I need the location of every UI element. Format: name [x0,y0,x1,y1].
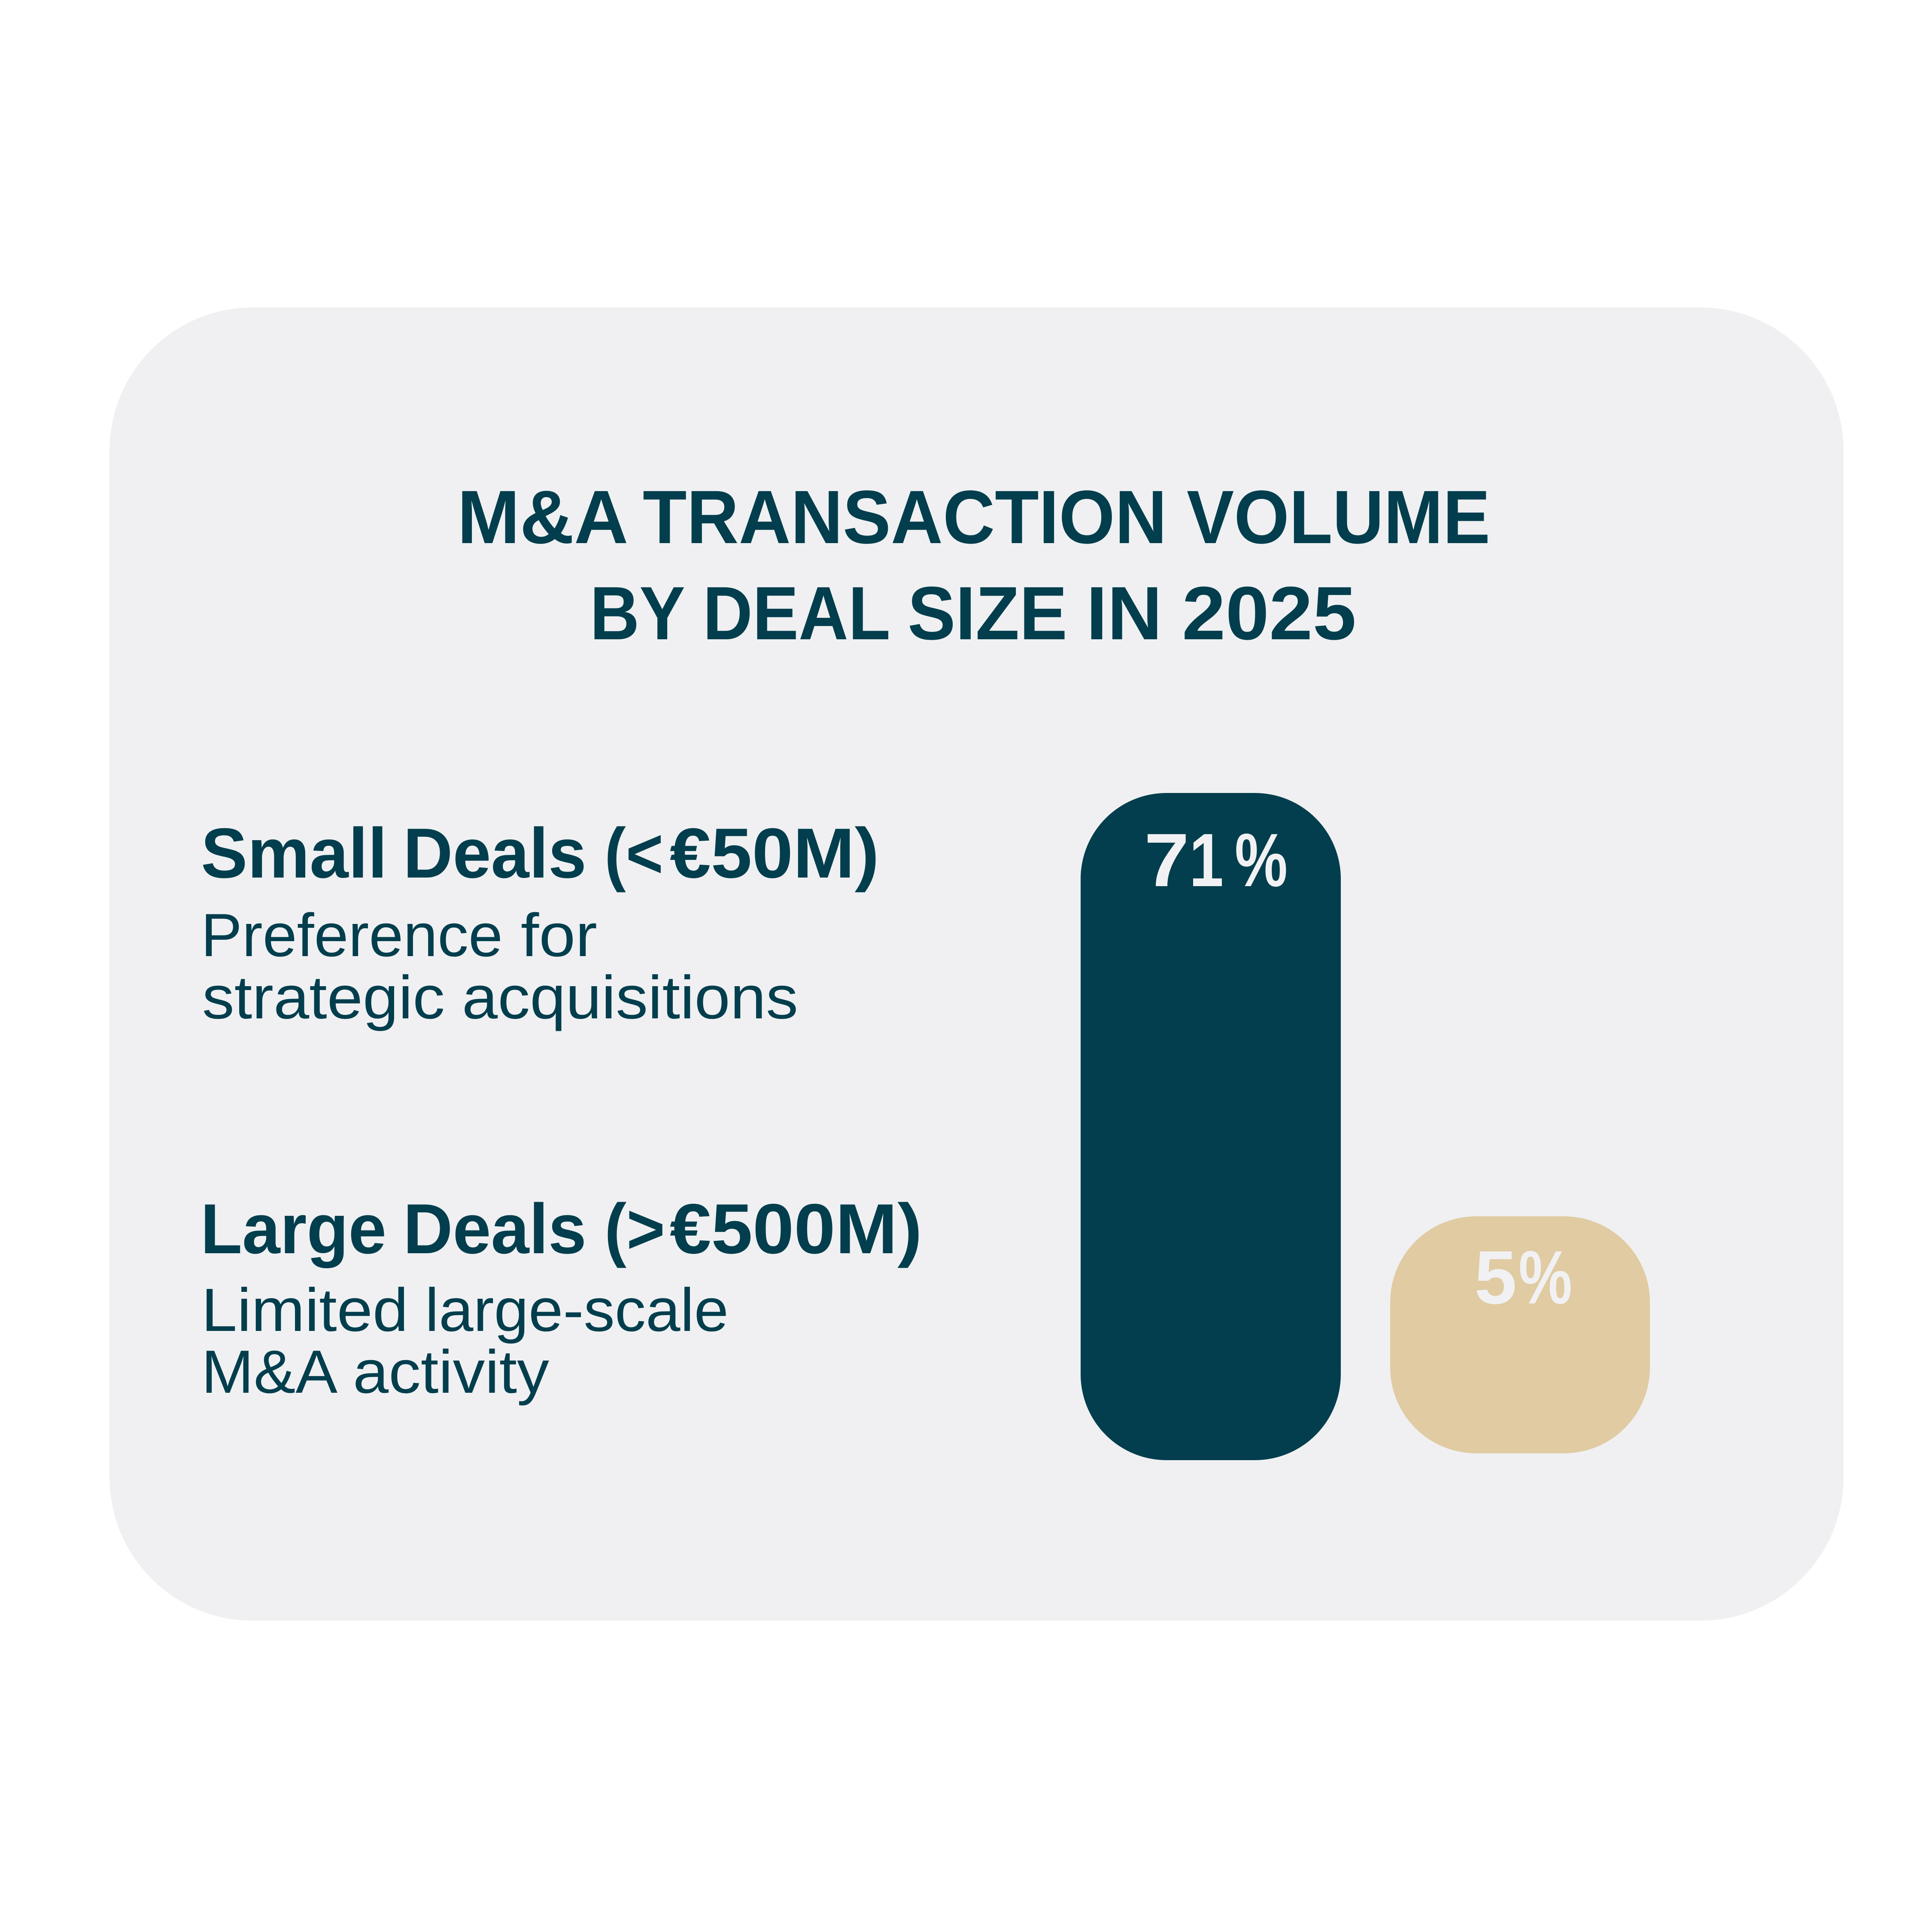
text block: large deals: Limited [201,1276,408,1344]
text block: large deals: large-scale [425,1276,729,1344]
title: IN [1086,571,1162,656]
text block: small deals: €50M) [670,814,879,893]
bar: large deals 5% [1390,1216,1650,1453]
text block: large deals: €500M) [670,1189,922,1268]
text block: large deals: Deals [403,1189,586,1268]
title [457,475,1490,656]
title: DEAL [703,571,889,656]
text block: large deals: activity [353,1338,549,1406]
bar: small deals 71% [1081,793,1341,1460]
text block: small deals: Preference [201,901,503,969]
title: TRANSACTION [643,475,1167,559]
text block: small deals: Deals [403,814,586,893]
text block: small deals [201,814,879,1032]
text block: small deals: (< [605,814,663,893]
title: M&A [457,475,626,559]
text block: large deals [200,1189,922,1406]
bar: small deals 71%: % [1235,818,1288,902]
panel: background card [109,307,1844,1621]
text block: large deals: Large [200,1189,386,1268]
title: SIZE [908,571,1067,656]
text block: large deals: M&A [201,1338,337,1406]
bar: large deals 5%: % [1519,1236,1572,1320]
bar: small deals 71%: 1 [1189,818,1224,902]
bar chart: small vs large deals [1081,793,1650,1460]
bar: small deals 71%: 7 [1144,818,1189,902]
title: BY [590,571,684,656]
bar: large deals 5%: 5 [1474,1236,1517,1320]
text block: small deals: strategic [202,963,445,1032]
text block: large deals: (> [605,1189,665,1268]
title: VOLUME [1187,475,1490,559]
title: 2025 [1182,571,1356,656]
text block: small deals: Small [201,814,387,893]
text block: small deals: acquisitions [462,963,798,1032]
text block: small deals: for [521,901,597,969]
